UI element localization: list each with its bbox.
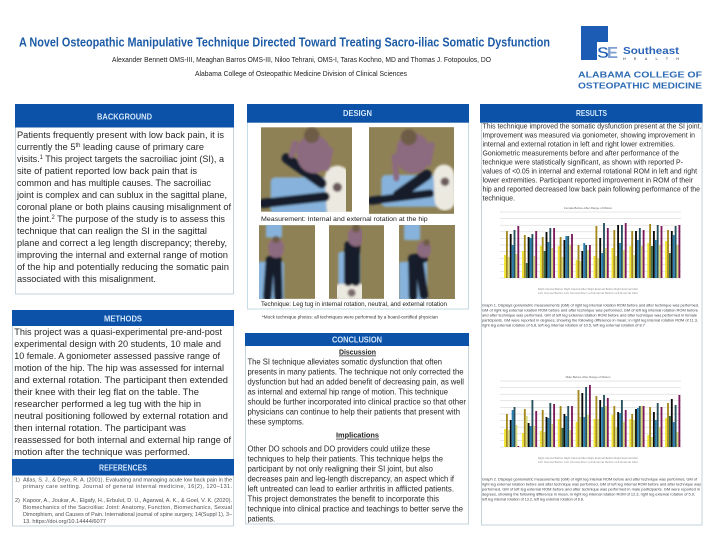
background text: [16, 130, 231, 284]
panel: background: [15, 104, 234, 294]
reference list: 1): [15, 478, 20, 484]
caption: graph 1: Graph 1. Displays goniometric measurements (GM) of right leg internal rotation ROM before and after technique was performed,: [482, 303, 699, 308]
discussion text: The SI technique alleviates somatic dysfunction that often: [248, 357, 442, 366]
discussion text: physicians can continue to help their patients that present with: [248, 407, 460, 416]
implications text: left untreated can lead to earlier arthritis in afflicted patients.: [248, 485, 454, 494]
panel: methods: [12, 310, 234, 459]
implications text: techniques to help their patients. This technique helps the: [248, 455, 444, 464]
bar chart: female range of motion: Female Before-After Range of Motion: [564, 206, 612, 210]
caption: graph 1: right leg external rotation of 6.8, left leg internal rotation of 10.5, left leg external rotation of 8.7: [482, 323, 646, 328]
implications text: participant by not only realigning their SI joint, but also: [248, 465, 434, 474]
background text: This project targets the sacroiliac joint (SI), a: [43, 154, 225, 164]
photo: external rotation measurement: [369, 127, 454, 214]
panel: design: [247, 104, 469, 309]
results text: technique.: [482, 193, 515, 202]
background text: the joint.: [17, 214, 52, 224]
reference list: Kapoor, A., Joukar, A., Elgafy, H., Erbulut, D. U., Agarwal, A. K., & Goel, V. K. (2020).: [23, 498, 232, 504]
caption: graph 1: participants. GM were reported in degrees, showing the following difference in mean; in right leg internal rotation ROM of 11.3,: [482, 318, 698, 323]
reference list: 13. https://doi.org/10.14444/6077: [23, 519, 106, 525]
methods text: [14, 327, 231, 457]
photo: internal rotation measurement: [261, 127, 352, 212]
methods text: reassessed for both internal and external hip range of: [14, 435, 231, 445]
caption: graph 2: [482, 477, 701, 502]
logo: Southeast Health and Alabama College of Osteopathic Medicine: [578, 26, 702, 90]
background text: plane and correct a leg length discrepancy; thereby,: [17, 238, 227, 248]
caption: graph 2: left leg internal rotation of 13.2, left leg external rotation of 6.8.: [482, 497, 584, 502]
methods text: 10 female. A goniometer assessed passive range of: [14, 351, 220, 361]
caption: technique: Technique: Leg tug in internal rotation, neutral, and external rotation: [261, 301, 447, 308]
panel: conclusion: [245, 333, 469, 524]
heading: methods: METHODS: [104, 315, 143, 324]
implications text: Other DO schools and DO providers could utilize these: [248, 445, 431, 454]
background text: associated with this misalignment.: [17, 274, 156, 284]
results text: lower extremities. Participant reported improvement in ROM of their: [482, 175, 693, 184]
discussion text: presents in many patients. The technique not only corrected the: [248, 367, 464, 376]
methods text: and external rotation. The participant then extended: [14, 375, 228, 385]
results text: technique were statistically significant, as shown with reported P-: [482, 157, 683, 166]
panel: results: [480, 104, 703, 525]
affiliation: Alabama College of Osteopathic Medicine Division of Clinical Sciences: [195, 71, 407, 78]
reference list: [15, 478, 233, 525]
caption: graph 2: Graph 2. Displays goniometric measurements (GM) of right leg internal ROM before and after technique was performed, GM of: [482, 477, 698, 482]
background text: of the hip and potentially reducing the somatic pain: [17, 262, 229, 272]
logo: Southeast Health and Alabama College of Osteopathic Medicine: S: [597, 45, 609, 62]
heading: conclusion: CONCLUSION: [332, 336, 382, 345]
caption: graph 2: performed, GM of left leg external ROM before and after technique was performed in male participants. GM were reported in: [482, 487, 700, 492]
methods text: experimental design with 20 students, 10 male and: [14, 339, 221, 349]
methods text: motion after the technique was performed.: [14, 447, 190, 457]
bar chart: female range of motion: [500, 206, 681, 295]
caption: graph 1: [482, 303, 699, 328]
background text: Patients frequently present with low back pain, it is: [17, 130, 224, 140]
authors: Alexander Bennett OMS-III, Meaghan Barros OMS-III, Niloo Tehrani, OMS-I, Taras Kochno, MD and Thomas J. Fotopoulos, DO: [112, 57, 492, 64]
reference list: primary care setting. Journal of general internal medicine, 16(2), 120–131.: [23, 484, 232, 490]
implications text: decreases pain and leg-length discrepancy, an aspect which if: [248, 475, 455, 484]
reference list: Atlas, S. J., & Deyo, R. A. (2001). Evaluating and managing acute low back pain in the: [23, 478, 232, 484]
logo: Southeast Health and Alabama College of Osteopathic Medicine: E: [607, 45, 618, 62]
caption: graph 2: degrees, showing the following difference in mean; in right leg internal rotation ROM of 12.3, right leg external rotation of 5.9,: [482, 492, 695, 497]
photo disclaimer note: *Mock technique photos: all techniques were performed by a board-certified physician: [262, 314, 439, 320]
caption: graph 1: and after technique was performed, GM of left leg external rotation ROM before and after technique was performed in female: [482, 313, 698, 318]
background text: site of patient reported low back pain that is: [17, 166, 197, 176]
logo: Southeast Health and Alabama College of Osteopathic Medicine: HEALTH: [623, 57, 679, 61]
results text: hip and reported decreased low back pain following performance of the: [482, 184, 700, 193]
background text: visits.: [17, 154, 40, 164]
results text: This technique improved the somatic dysfunction present at the SI joint.: [482, 121, 702, 130]
reference list: 2): [15, 498, 20, 504]
subheading: implications: Implications: [336, 431, 379, 440]
legend: female chart: Right Internal Before Right Internal After Right External Before Right External After: [538, 287, 638, 291]
discussion text: these symptoms.: [248, 417, 304, 426]
caption: graph 1: GM of right leg external rotation ROM before and after technique was performed, GM of left leg internal rotation ROM before: [482, 308, 699, 313]
discussion text: [248, 357, 466, 426]
panel: references: [12, 459, 234, 526]
caption: measurement: Measurement: Internal and external rotation at the hip: [261, 216, 428, 223]
photo: leg tug in internal rotation: [259, 225, 315, 299]
methods text: their knee with their leg flat on the table. The: [14, 387, 199, 397]
legend: male chart: Right Internal Before Right Internal After Right External Before Right External After: [538, 456, 638, 460]
reference list: Dimorphism, and Causes of Pain. International journal of spine surgery, 14(Suppl 1), 3–: [23, 512, 233, 518]
results text: Improvement was measured via goniometer, showing improvement in: [482, 130, 695, 139]
methods text: This project was a quasi-experimental pre-and-post: [14, 327, 222, 337]
implications text: patients.: [248, 515, 275, 524]
bar chart: male range of motion: Male Before-After Range of Motion: [566, 375, 611, 379]
heading: references: REFERENCES: [99, 464, 147, 473]
background text: leading cause of primary care: [80, 142, 204, 152]
background text: 1: [40, 155, 44, 161]
background text: technique that can realign the SI in the sagittal: [17, 226, 207, 236]
background text: 2: [51, 215, 55, 221]
bar chart: male range of motion: [500, 375, 681, 464]
background text: improving the internal and external range of motion: [17, 250, 228, 260]
background text: The purpose of the study is to assess this: [55, 214, 225, 224]
legend: female chart: [538, 287, 638, 295]
photo: leg tug in neutral: [329, 225, 384, 299]
results text: [482, 121, 702, 202]
legend: male chart: [538, 456, 638, 464]
results text: Goniometric measurements before and after performance of the: [482, 148, 679, 157]
photo: leg tug in external rotation: [399, 225, 455, 299]
reference list: Biomechanics of the Sacroiliac Joint: Anatomy, Function, Biomechanics, Sexual: [23, 505, 232, 511]
discussion text: as internal and external hip range of motion. This technique: [248, 387, 449, 396]
subheading: discussion: Discussion: [339, 348, 376, 356]
caption: graph 2: right leg external rotation before and after technique was performed, GM of left leg internal ROM before and after technique was: [482, 482, 701, 487]
background text: th: [75, 143, 80, 149]
discussion text: dysfunction but had an added benefit of decreasing pain, as well: [248, 377, 464, 386]
background text: joint is complex and can sublux in the sagittal plane,: [16, 190, 227, 200]
results text: values of <0.05 in internal and external rotational ROM in left and right: [482, 166, 698, 175]
implications text: This project demonstrates the benefit to incorporate this: [248, 495, 439, 504]
logo: Southeast Health and Alabama College of Osteopathic Medicine: OSTEOPATHIC MEDICINE: [578, 80, 702, 90]
implications text: technique into clinical practice and teachings to better serve the: [248, 505, 464, 514]
background text: currently the 5: [17, 142, 76, 152]
implications text: [248, 445, 464, 524]
legend: male chart: Left Internal Before Left Internal After Left External Before Left External After: [538, 460, 638, 464]
background text: coronal plane or both plains causing misalignment of: [17, 202, 231, 212]
results text: internal and external rotation in left and right lower extremities.: [482, 139, 675, 148]
title: A Novel Osteopathic Manipulative Technique Directed Toward Treating Sacro-iliac Somatic Dysfunction: [19, 34, 550, 50]
heading: background: BACKGROUND: [97, 112, 152, 122]
methods text: neutral positioning followed by external rotation and: [14, 411, 228, 421]
methods text: motion of the hip. The hip was assessed for internal: [14, 363, 224, 373]
heading: results: RESULTS: [576, 109, 607, 118]
logo: Southeast Health and Alabama College of Osteopathic Medicine: ALABAMA COLLEGE OF: [578, 70, 702, 80]
heading: design: DESIGN: [343, 109, 372, 118]
background text: common and has multiple causes. The sacroiliac: [17, 178, 211, 188]
discussion text: should be further incorporated into clinical practice so that other: [248, 397, 466, 406]
legend: female chart: Left Internal Before Left Internal After Left External Before Left External After: [538, 291, 638, 295]
logo: Southeast Health and Alabama College of Osteopathic Medicine: Southeast: [623, 45, 680, 57]
methods text: researcher performed a leg tug with the hip in: [14, 399, 201, 409]
methods text: then internal rotation. The participant was: [14, 423, 186, 433]
